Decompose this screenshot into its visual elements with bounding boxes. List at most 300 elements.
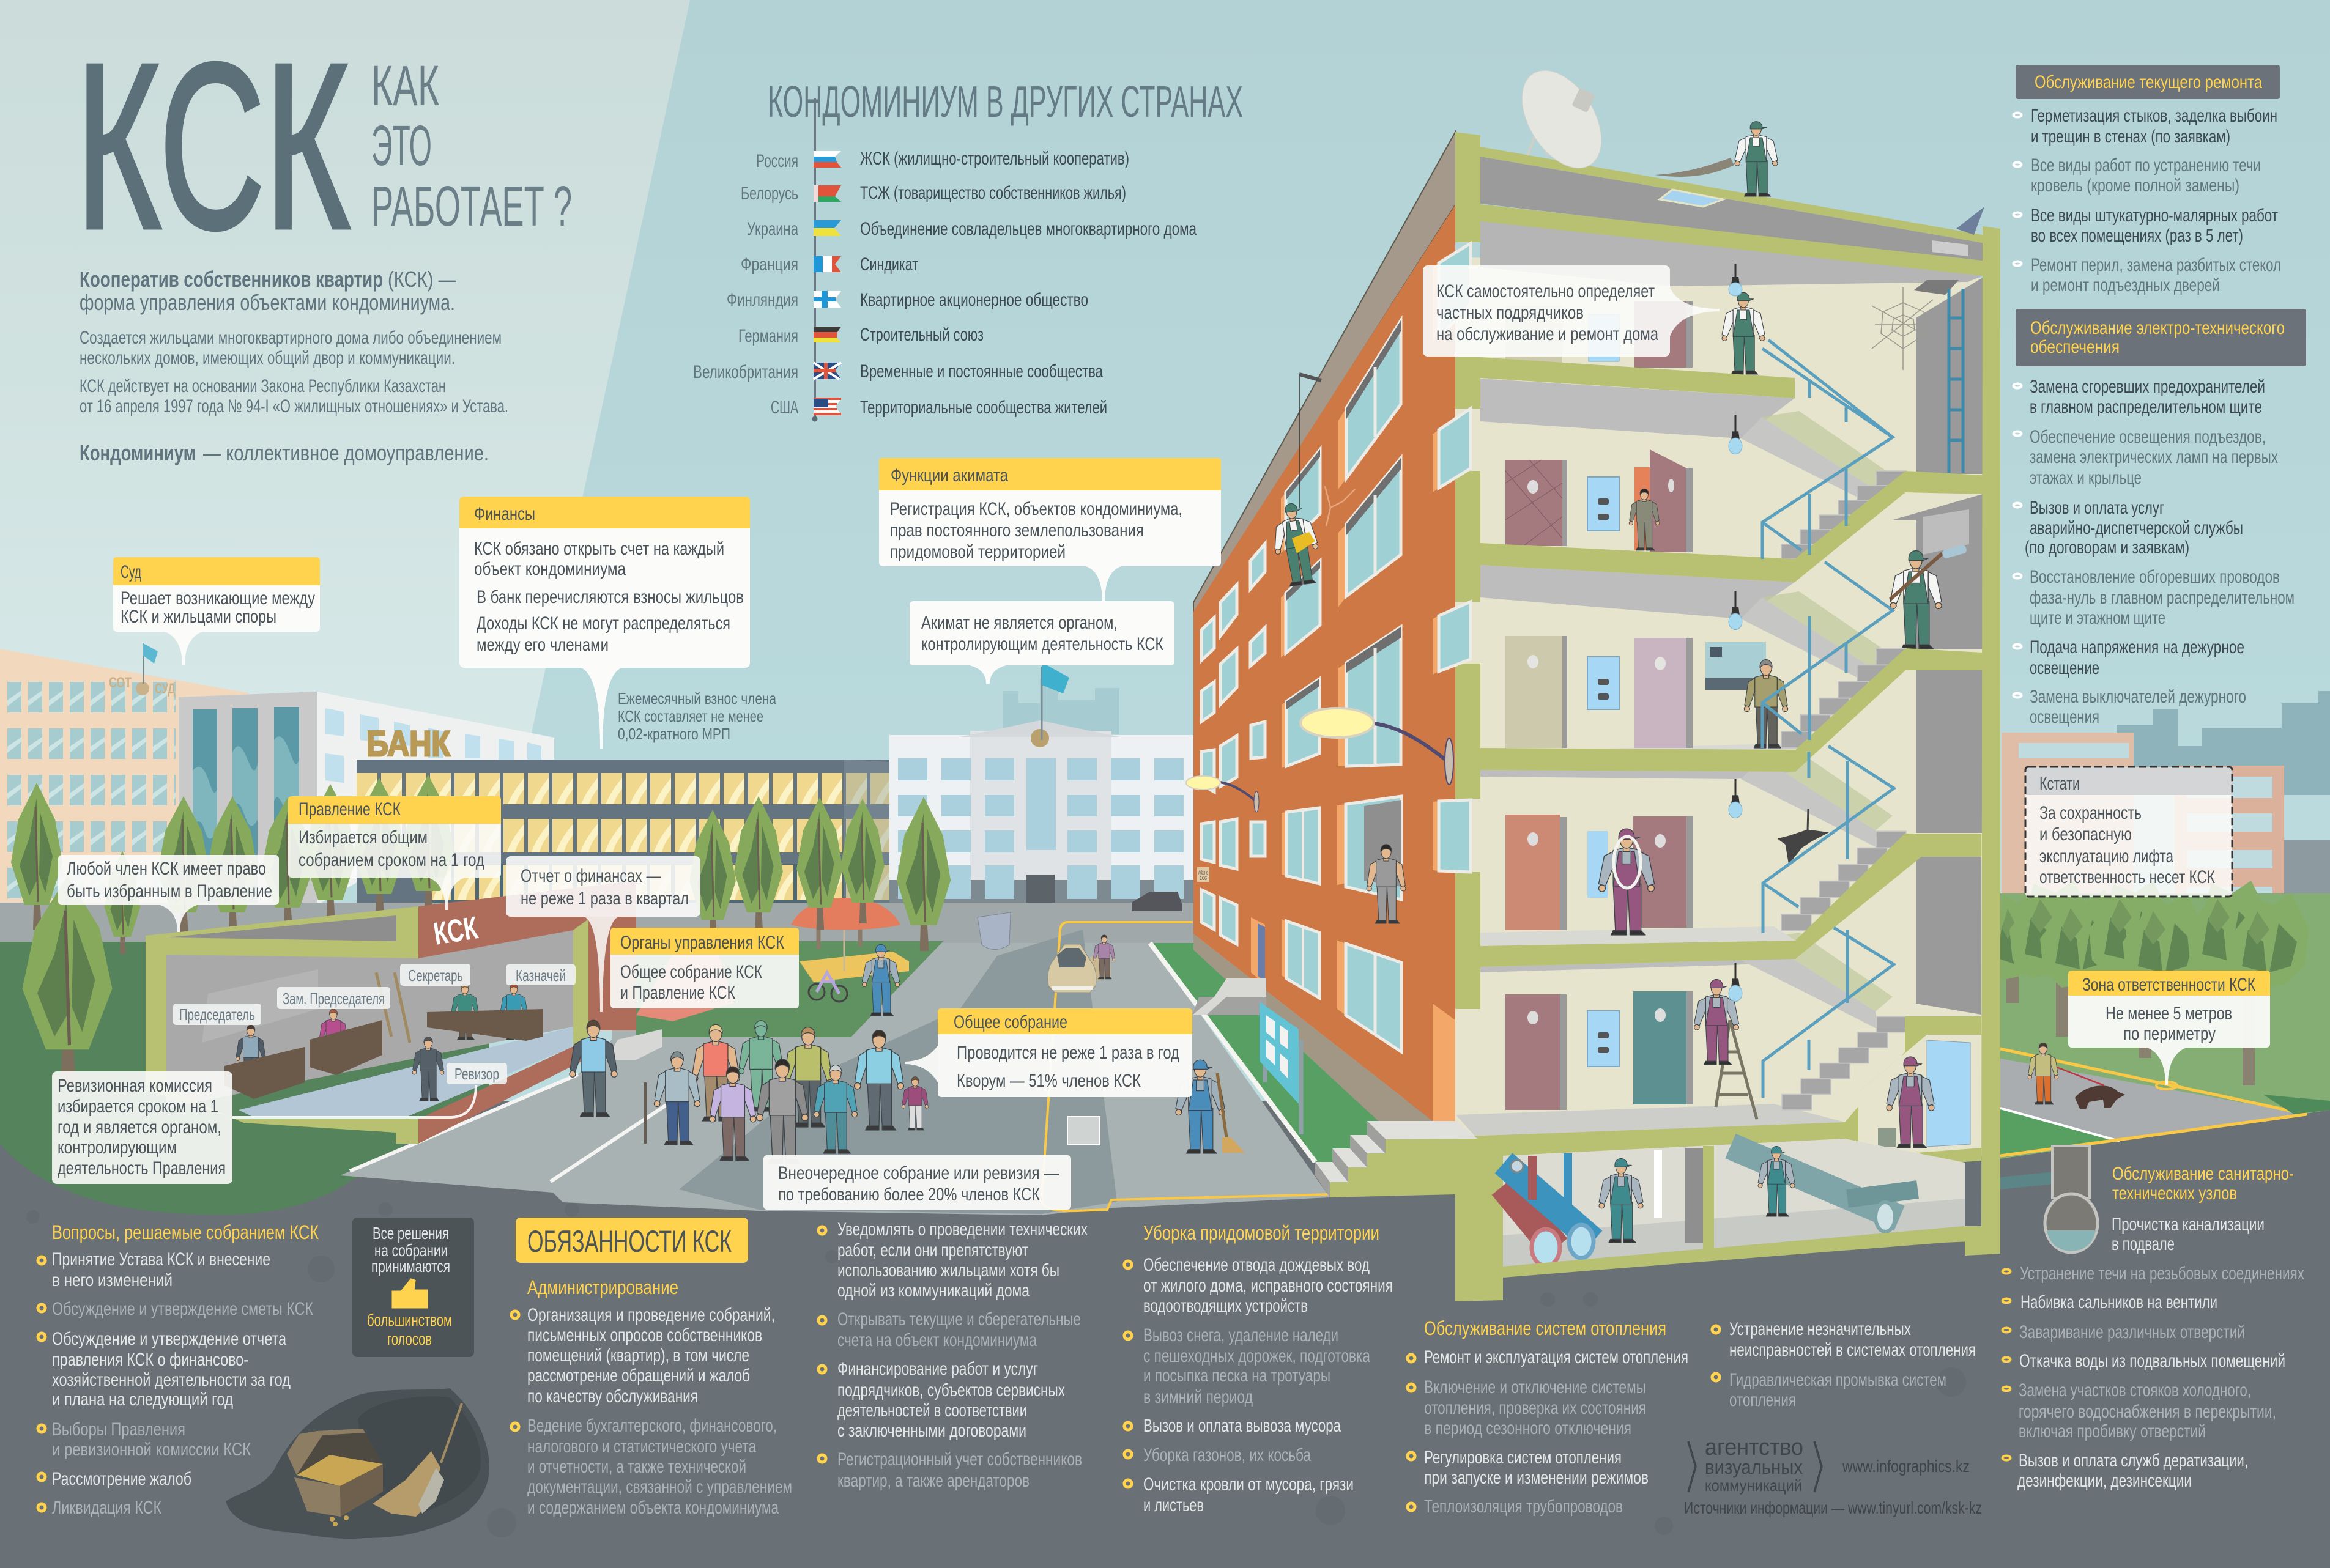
- callout: finances: Доходы КСК не могут распределяться: [477, 613, 730, 634]
- panel: heating systems: неисправностей в системах отопления: [1729, 1340, 1976, 1360]
- panel: yard cleaning: и листьев: [1143, 1495, 1204, 1515]
- big tree left: [22, 876, 113, 1084]
- panel: yard cleaning: от жилого дома, исправного состояния: [1143, 1276, 1393, 1296]
- entrance steps: [606, 1029, 662, 1060]
- roof ladder: [1949, 289, 1963, 473]
- callout: finances: В банк перечисляются взносы жильцов: [477, 587, 744, 607]
- poplars behind KSK office: [11, 775, 951, 954]
- lamp, second floor: [1729, 779, 1742, 818]
- panel: notifications and finance: использованию жильцами хотя бы: [837, 1260, 1059, 1281]
- stair flight, level one: [1782, 1016, 1907, 1110]
- callout: audit commission: [52, 1071, 232, 1184]
- main title: РАБОТАЕТ ?: [371, 174, 572, 238]
- front entrance steps with landing: [1315, 1121, 1477, 1197]
- crowd of residents: [570, 1020, 929, 1164]
- roof: [1480, 157, 1983, 263]
- condominium names list: ТСЖ (товарищество собственников жилья): [860, 183, 1126, 203]
- playground lawn: [636, 941, 943, 1037]
- callout: audit commission: Ревизионная комиссия: [58, 1076, 212, 1096]
- concrete slabs and stair stringers: [1330, 357, 1983, 1301]
- callout: by the way: ответственность несет КСК: [2039, 867, 2215, 887]
- callout: general meeting: Кворум — 51% членов КСК: [957, 1071, 1141, 1091]
- panel: meeting questions: в него изменений: [52, 1270, 173, 1290]
- panel: current repairs: и ремонт подъездных дверей: [2031, 275, 2220, 295]
- little girl: [902, 1077, 929, 1130]
- manhole and sewer pipe: [2000, 1146, 2098, 1252]
- panel: notifications and finance: с заключенными договорами: [837, 1421, 1026, 1441]
- panel: meeting questions: Принятие Устава КСК и внесение: [52, 1249, 270, 1270]
- callout: any member: [58, 855, 279, 932]
- electrician with cable coil: [1599, 829, 1654, 935]
- reader at notice board: [1744, 660, 1788, 748]
- basement workers: [1599, 1158, 1643, 1243]
- address plate: Абая к.: [1198, 870, 1208, 876]
- country list: Белорусь: [741, 183, 798, 204]
- kneeling pipe fitter: [1758, 1146, 1795, 1216]
- intro text: КСК действует на основании Закона Республики Казахстан: [80, 376, 446, 396]
- road on the right: [2000, 1059, 2307, 1141]
- condominium names list: Квартирное акционерное общество: [860, 290, 1088, 310]
- panel: yard cleaning: Очистка кровли от мусора, грязи: [1143, 1474, 1354, 1495]
- panel: notifications and finance: квартир, а также арендаторов: [837, 1471, 1030, 1491]
- condominium names list: [860, 149, 1197, 418]
- sweeper: [1176, 1060, 1245, 1153]
- intro text: нескольких домов, имеющих общий двор и коммуникации.: [80, 348, 455, 368]
- panel: meeting questions: Выборы Правления: [52, 1419, 185, 1440]
- panel: sanitary maintenance: Прочистка канализации: [2112, 1215, 2265, 1235]
- bank tower: [179, 692, 554, 905]
- worker on ladder: [1694, 980, 1757, 1119]
- panel: sanitary maintenance: Заваривание различных отверстий: [2019, 1322, 2245, 1342]
- panel: meeting questions: правления КСК о финансово-: [52, 1350, 248, 1370]
- KSK office cutaway: [146, 881, 636, 1144]
- alien: [738, 1021, 784, 1111]
- stair flight, level three: [1781, 648, 1906, 748]
- hammer worker: [1722, 292, 1765, 374]
- old woman in teal: [814, 1065, 858, 1153]
- panel: heating systems: Теплоизоляция трубопроводов: [1424, 1496, 1623, 1517]
- satellite dish: [1505, 56, 1618, 182]
- panel: heating systems: Ремонт и эксплуатация систем отопления: [1424, 1347, 1688, 1367]
- panel: electrical maintenance: [2014, 309, 2306, 727]
- main title: КАК: [371, 54, 439, 117]
- solar panel: [1956, 207, 1984, 235]
- callout: governing bodies: и Правление КСК: [620, 983, 735, 1003]
- main building, cut-away interior: [1315, 56, 2000, 1301]
- callout: finances: Финансы: [474, 504, 535, 524]
- panel: electrical maintenance: (по договорам и заявкам): [2025, 538, 2189, 558]
- teal pipes: [1731, 1146, 1899, 1218]
- sky background: [0, 0, 2330, 1101]
- condominium names list: Территориальные сообщества жителей: [860, 398, 1107, 418]
- auditor: [412, 1037, 444, 1101]
- road: [679, 930, 1117, 1214]
- panel: administration: Организация и проведение собраний,: [527, 1305, 775, 1325]
- man in grey suit: [757, 1059, 808, 1164]
- callout: by the way: эксплуатацию лифта: [2039, 846, 2173, 867]
- panel: sanitary maintenance: дезинфекции, дезинсекции: [2017, 1471, 2192, 1491]
- callout: responsibility zone: по периметру: [2123, 1024, 2216, 1044]
- country list: Россия: [756, 151, 798, 171]
- agency logo and sources: www.infographics.kz: [1842, 1457, 1970, 1476]
- callout: extraordinary meeting: Внеочередное собрание или ревизия —: [778, 1163, 1059, 1183]
- panel: sanitary maintenance: Набивка сальников на вентили: [2020, 1292, 2217, 1312]
- intro text: [80, 267, 508, 465]
- panel: heating systems: в период сезонного отключения: [1424, 1418, 1631, 1438]
- monthly fee note: Ежемесячный взнос члена: [618, 689, 776, 708]
- callout: audit commission: контролирующим: [58, 1137, 177, 1158]
- panel: heating systems: [1408, 1317, 1976, 1517]
- country list: США: [771, 398, 798, 418]
- beige car: [1048, 944, 1111, 993]
- pale paper wedge: [0, 0, 690, 758]
- intro text: Кооператив собственников квартир: [80, 267, 383, 292]
- distant city skyline, right: [2117, 691, 2330, 795]
- flags: [814, 151, 841, 415]
- panel: sanitary maintenance: [2003, 1164, 2304, 1491]
- intro text: (КСК) —: [388, 267, 456, 292]
- back flights of stairs: [1741, 411, 1893, 508]
- panel: electrical maintenance: этажах и крыльце: [2030, 468, 2142, 488]
- callout: contractors: [1423, 265, 1720, 357]
- panel: notifications and finance: Финансирование работ и услуг: [837, 1359, 1038, 1379]
- panel: notifications and finance: Регистрационный учет собственников: [837, 1449, 1082, 1470]
- callout: by the way: За сохранность: [2039, 803, 2142, 823]
- panel: yard cleaning: в зимний период: [1143, 1387, 1253, 1407]
- agency logo and sources: коммуникаций: [1705, 1476, 1802, 1495]
- panel: meeting questions: Обсуждение и утверждение отчета: [52, 1329, 286, 1349]
- doors, top floor: [1505, 301, 1693, 368]
- playground: [636, 898, 909, 1021]
- thief: [1629, 489, 1660, 550]
- court building СОТ СУД: [0, 643, 248, 905]
- court building СОТ СУД: СУД: [155, 681, 175, 697]
- panel: yard cleaning: Вызов и оплата вывоза мусора: [1143, 1416, 1341, 1436]
- back flight, second floor: [1741, 752, 1893, 848]
- panel: notifications and finance: подрядчиков, субъектов сервисных: [837, 1380, 1065, 1400]
- callout: contractors: на обслуживание и ремонт дома: [1436, 324, 1658, 344]
- callout: financial report: не реже 1 раза в квартал: [521, 889, 689, 909]
- whitewash patch: [1923, 509, 1969, 555]
- callout: by the way: и безопасную: [2039, 824, 2132, 845]
- corner windows: [1433, 243, 1471, 872]
- man in olive shirt: [784, 1027, 833, 1127]
- climber on rope: [1269, 374, 1323, 588]
- left lawn: [0, 942, 489, 1215]
- heading: duties of KSK: ОБЯЗАННОСТИ КСК: [527, 1224, 732, 1259]
- panel: administration: [511, 1276, 792, 1518]
- callout: finances: КСК обязано открыть счет на каждый: [474, 539, 724, 559]
- callout: any member: Любой член КСК имеет право: [67, 859, 266, 879]
- agency logo and sources: визуальных: [1705, 1456, 1803, 1478]
- country list: Украина: [747, 219, 798, 239]
- panel: notifications and finance: [818, 1219, 1088, 1491]
- callout: governing bodies: Органы управления КСК: [620, 933, 784, 953]
- panel: current repairs: [2014, 65, 2281, 295]
- callout: audit commission: год и является органом,: [58, 1117, 221, 1137]
- monthly fee note: 0,02-кратного МРП: [618, 725, 730, 743]
- panel: electrical maintenance: аварийно-диспетчерской службы: [2030, 518, 2243, 538]
- country list: Германия: [738, 326, 798, 346]
- callout: responsibility zone: [2068, 971, 2270, 1085]
- callout: court: [113, 557, 320, 665]
- low glass bank building: [357, 760, 889, 906]
- dark ground base: [0, 1101, 2330, 1568]
- woman in red: [692, 1024, 740, 1121]
- panel: notifications and finance: Открывать текущие и сберегательные: [837, 1309, 1081, 1329]
- man with phone: [855, 1030, 903, 1130]
- callout: contractors: частных подрядчиков: [1436, 303, 1584, 323]
- stair flight, level two: [1781, 831, 1906, 931]
- right back walls: [1893, 278, 1983, 1015]
- panel: meeting questions: [38, 1221, 319, 1518]
- callout: akimat role: контролирующим деятельность КСК: [921, 634, 1163, 654]
- panel: notifications and finance: счета на объект кондоминиума: [837, 1330, 1037, 1350]
- callout: general meeting: [905, 1008, 1192, 1097]
- red and blue pipes: [1504, 1185, 1556, 1248]
- panel: current repairs: и трещин в стенах (по заявкам): [2031, 127, 2230, 147]
- panel: sanitary maintenance: Вызов и оплата служб дератизации,: [2019, 1451, 2248, 1471]
- panel: sanitary maintenance: в подвале: [2112, 1234, 2175, 1254]
- panel: administration: по качеству обслуживания: [527, 1386, 698, 1407]
- desks: [224, 1047, 305, 1099]
- panel: heating systems: Гидравлическая промывка систем: [1729, 1370, 1946, 1390]
- dark SUV: [1132, 892, 1182, 911]
- trash container: [978, 912, 1011, 949]
- callout: audit commission: избирается сроком на 1: [58, 1096, 218, 1117]
- street grate: [1067, 1117, 1100, 1145]
- panel: meeting questions: Ликвидация КСК: [52, 1498, 161, 1518]
- country list: Финляндия: [727, 290, 798, 310]
- callout: contractors: КСК самостоятельно определяет: [1436, 281, 1655, 301]
- panel: majority decisions: на собрании: [374, 1241, 448, 1260]
- panel: heating systems: отопления: [1729, 1390, 1796, 1410]
- panel: meeting questions: Вопросы, решаемые собранием КСК: [52, 1221, 319, 1243]
- panel: notifications and finance: одной из коммуникаций дома: [837, 1281, 1030, 1301]
- man in the window: [1367, 845, 1406, 923]
- callout: board: собранием сроком на 1 год: [299, 850, 484, 870]
- panel: heating systems: отопления, проверка их состояния: [1424, 1398, 1646, 1418]
- panel: meeting questions: хозяйственной деятельности за год: [52, 1370, 291, 1390]
- distant city skyline, centre: [1003, 679, 1119, 734]
- callout: board: Избирается общим: [299, 827, 428, 848]
- court building СОТ СУД: СОТ: [109, 675, 132, 691]
- callout: responsibility zone: Зона ответственности КСК: [2082, 975, 2255, 995]
- agency logo and sources: [1684, 1435, 1982, 1517]
- railings: [1762, 340, 1894, 1098]
- office role labels: Председатель: [179, 1005, 255, 1024]
- callout: governing bodies: [610, 928, 799, 1008]
- callout: finances: объект кондоминиума: [474, 559, 626, 579]
- facade windows, far columns: [1201, 544, 1265, 944]
- callout: finances: между его членами: [477, 635, 609, 655]
- facade windows, column B: [1281, 449, 1320, 998]
- panel: administration: налогового и статистического учета: [527, 1437, 756, 1457]
- pressure gauge: [1511, 1160, 1523, 1172]
- office role labels: Ревизор: [454, 1065, 499, 1083]
- panel: heating systems: Обслуживание систем отопления: [1424, 1317, 1666, 1339]
- doors, fourth floor: [1505, 449, 1693, 552]
- country list: [693, 151, 798, 418]
- callout: court: Решает возникающие между: [121, 588, 315, 608]
- panel: current repairs: Обслуживание текущего ремонта: [2035, 72, 2262, 92]
- callout: by the way: Кстати: [2039, 774, 2080, 794]
- far pale buildings, right: [2002, 733, 2330, 947]
- connector from auditor label: [232, 1085, 476, 1117]
- pillar segments: [1455, 132, 2000, 1256]
- agency logo and sources: агентство: [1705, 1435, 1803, 1460]
- panel: current repairs: кровель (кроме полной замены): [2031, 176, 2239, 196]
- right hill and trees: [1988, 881, 2330, 1159]
- KSK sign: КСК: [431, 910, 480, 952]
- panel: majority decisions: большинством: [367, 1311, 452, 1329]
- panel: yard cleaning: Вывоз снега, удаление наледи: [1143, 1325, 1338, 1345]
- facade windows, column A: [1337, 320, 1401, 1052]
- flag pole: [812, 98, 817, 422]
- back flight, third floor: [1741, 591, 1893, 688]
- callout: court: КСК и жильцами споры: [121, 607, 276, 627]
- plaza pavement: [340, 943, 1330, 1215]
- panel: electrical maintenance: Вызов и оплата услуг: [2030, 498, 2164, 518]
- panel: administration: документации, связанной с управлением: [527, 1477, 792, 1497]
- woman in lilac: [710, 1067, 756, 1161]
- panel: electrical maintenance: освещение: [2030, 658, 2099, 678]
- notice board: [1260, 1002, 1301, 1134]
- monthly fee note: [618, 689, 776, 743]
- callout: extraordinary meeting: [763, 1155, 1071, 1210]
- doors, ground floor: [1505, 991, 1693, 1110]
- intro text: форма управления объектами кондоминиума.: [80, 290, 455, 315]
- wall crack: [1325, 486, 1355, 526]
- doors, second floor: [1505, 815, 1693, 930]
- icon: thumbs up: [393, 1279, 427, 1307]
- callout: general meeting: Общее собрание: [954, 1012, 1067, 1032]
- callout: akimat role: [910, 601, 1174, 684]
- callout: any member: быть избранным в Правление: [67, 881, 272, 901]
- panel: sanitary maintenance: включая пробивку отверстий: [2019, 1421, 2206, 1441]
- ground floor utility room: [1858, 1035, 1981, 1157]
- panel: electrical maintenance: Подача напряжения на дежурное: [2030, 637, 2244, 657]
- panel: electrical maintenance: Замена выключателей дежурного: [2030, 687, 2246, 707]
- panel: yard cleaning: с пешеходных дорожек, подготовка: [1143, 1346, 1370, 1366]
- presenter: [570, 1020, 617, 1117]
- lawn kerb: [1150, 943, 1315, 1162]
- callout: akimat functions: Регистрация КСК, объектов кондоминиума,: [890, 499, 1182, 519]
- front stair flights: [1781, 471, 1906, 559]
- panel: yard cleaning: [1124, 1222, 1393, 1515]
- callout: audit commission: деятельность Правления: [58, 1158, 226, 1178]
- panel: electrical maintenance: обеспечения: [2030, 337, 2120, 357]
- icon: treasure chest with skeleton: [226, 1388, 489, 1539]
- ground strip behind yards: [0, 903, 1199, 945]
- callout: akimat functions: прав постоянного землепользования: [890, 520, 1144, 541]
- heading: duties of KSK: [516, 1218, 748, 1263]
- callout: financial report: [506, 856, 700, 1012]
- roofer: [1655, 122, 1778, 196]
- panel: yard cleaning: Уборка придомовой территории: [1143, 1222, 1379, 1244]
- office role labels: Казначей: [516, 966, 566, 985]
- panel: majority decisions: голосов: [387, 1329, 432, 1348]
- panel: heating systems: Включение и отключение системы: [1424, 1377, 1646, 1397]
- panel: majority decisions: принимаются: [371, 1257, 450, 1276]
- callout: responsibility zone: Не менее 5 метров: [2106, 1004, 2232, 1024]
- condominium names list: Синдикат: [860, 254, 918, 275]
- callout: court: Суд: [121, 562, 141, 582]
- panel: yard cleaning: Уборка газонов, их косьба: [1143, 1445, 1311, 1465]
- panel: yard cleaning: водоотводящих устройств: [1143, 1296, 1308, 1316]
- back flight, first floor: [1741, 933, 1893, 1029]
- agency logo and sources: Источники информации — www.tinyurl.com/ksk-kz: [1684, 1498, 1982, 1517]
- woman by the car: [1093, 935, 1115, 979]
- intro text: Кондоминиум: [80, 440, 196, 465]
- akimat building: [889, 662, 1195, 908]
- street lamps: [1186, 708, 1453, 812]
- ceilings: [1480, 379, 1795, 972]
- rake and shovel: [376, 972, 410, 1043]
- basement: [1503, 1139, 2000, 1278]
- dog: [2075, 1085, 2125, 1109]
- office role labels: [173, 964, 576, 1084]
- pavement edging: [350, 1074, 666, 1182]
- panel: administration: письменных опросов собственников: [527, 1325, 762, 1345]
- callout: akimat functions: придомовой территорией: [890, 542, 1066, 562]
- callout: finances: [459, 497, 750, 749]
- callout: extraordinary meeting: по требованию более 20% членов КСК: [778, 1185, 1040, 1205]
- bank tower: БАНК: [366, 724, 451, 764]
- panel: sanitary maintenance: Замена участков стояков холодного,: [2019, 1380, 2251, 1400]
- lamp, third floor: [1729, 591, 1742, 630]
- panel: sanitary maintenance: технических узлов: [2112, 1183, 2237, 1204]
- yard boundary line: [1042, 922, 1330, 1211]
- lamp, fourth floor: [1729, 415, 1742, 454]
- panel: meeting questions: Рассмотрение жалоб: [52, 1469, 191, 1489]
- panel: current repairs: во всех помещениях (раз в 5 лет): [2031, 226, 2243, 246]
- intro text: от 16 апреля 1997 года № 94-I «О жилищных отношениях» и Устава.: [80, 396, 508, 416]
- callout: akimat functions: [879, 458, 1221, 602]
- condominium names list: Объединение совладельцев многоквартирного дома: [860, 219, 1197, 239]
- callout: board: Правление КСК: [299, 799, 401, 819]
- condominium names list: Временные и постоянные сообщества: [860, 361, 1103, 382]
- panel: notifications and finance: работ, если они препятствуют: [837, 1240, 1028, 1260]
- panel: administration: и отчетности, а также технической: [527, 1457, 746, 1477]
- doors, third floor: [1505, 636, 1766, 748]
- address plate: 106: [1200, 875, 1207, 881]
- panel: majority decisions: Все решения: [373, 1224, 449, 1243]
- office staff: [236, 1025, 265, 1085]
- dog walker: [2028, 1043, 2058, 1104]
- panel: meeting questions: Обсуждение и утверждение сметы КСК: [52, 1299, 313, 1319]
- panel: yard cleaning: Обеспечение отвода дождевых вод: [1143, 1255, 1370, 1275]
- panel: heating systems: Устранение незначительных: [1729, 1319, 1911, 1339]
- lawn in front of building: [1150, 943, 1378, 1162]
- panel: notifications and finance: деятельностей в соответствии: [837, 1400, 1027, 1421]
- panel: notifications and finance: Уведомлять о проведении технических: [837, 1219, 1088, 1240]
- address plate: [1197, 867, 1209, 882]
- broken window edge: [1458, 823, 1471, 868]
- panel: administration: Администрирование: [527, 1276, 678, 1298]
- country list: Великобритания: [693, 362, 798, 382]
- condominium names list: ЖСК (жилищно-строительный кооператив): [860, 149, 1129, 169]
- heading: condominium abroad: КОНДОМИНИУМ В ДРУГИХ СТРАНАХ: [768, 78, 1243, 127]
- panel: heating systems: Регулировка систем отопления: [1424, 1448, 1622, 1468]
- panel: meeting questions: и плана на следующий год: [52, 1389, 233, 1410]
- callout: governing bodies: Общее собрание КСК: [620, 962, 762, 982]
- callout: general meeting: Проводится не реже 1 раза в год: [957, 1043, 1179, 1063]
- condominium names list: Строительный союз: [860, 325, 984, 345]
- panel: administration: помещений (квартир), в том числе: [527, 1345, 749, 1366]
- callout: by the way: [2025, 767, 2232, 897]
- gardener: [863, 944, 899, 1016]
